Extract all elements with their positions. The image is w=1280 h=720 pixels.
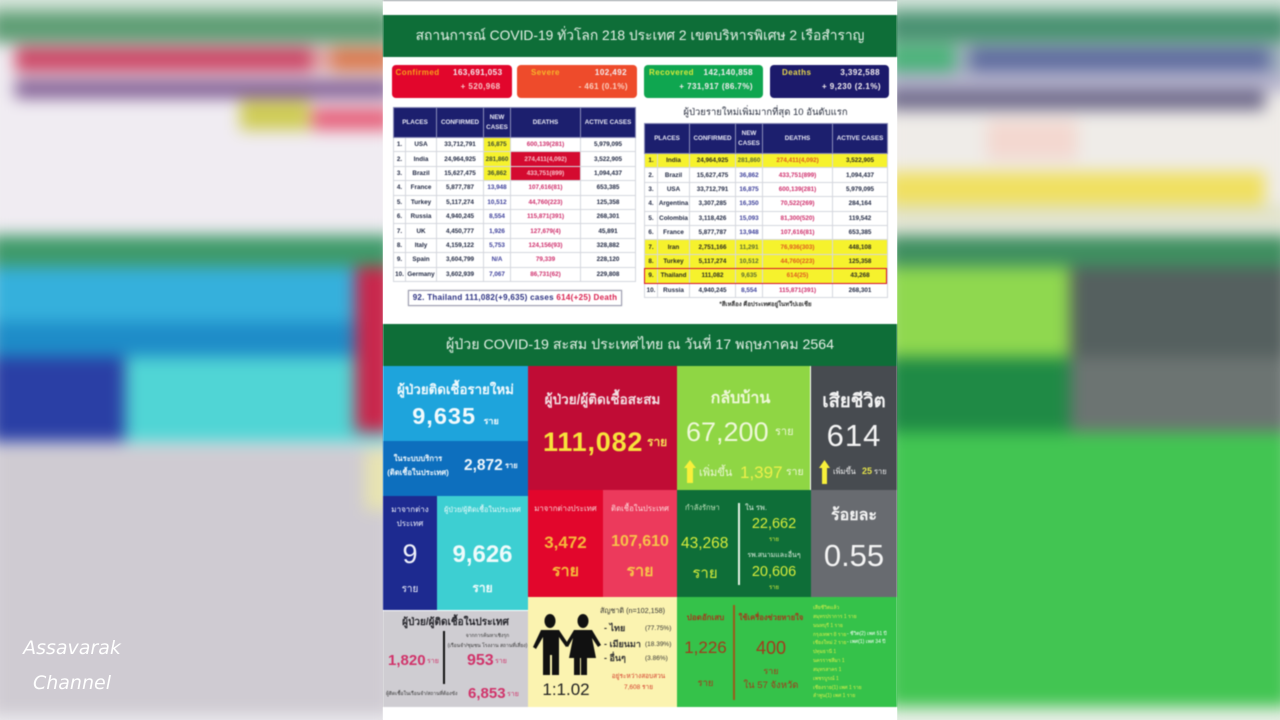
table: top 10 by total: 13,948 bbox=[487, 184, 507, 191]
text block: death details: กรุงเทพฯ 8 ราย bbox=[813, 632, 846, 638]
panel: in service system: (ติดเชื้อในประเทศ) bbox=[387, 468, 449, 477]
table: top 10 by new cases: 125,358 bbox=[849, 258, 871, 265]
table: top 10 by new cases: 3. bbox=[648, 186, 654, 193]
panel: domestic cumulative: ราย bbox=[627, 563, 653, 580]
table: top 10 by total: 16,875 bbox=[487, 141, 507, 148]
table: top 10 by total: 125,358 bbox=[597, 199, 619, 206]
table: top 10 by new cases: 70,522(269) bbox=[781, 200, 814, 207]
panel: in treatment: 20,606 bbox=[752, 564, 796, 580]
panel: percent fatality: ร้อยละ bbox=[831, 507, 877, 524]
panel: domestic breakdown: ราย bbox=[507, 691, 519, 698]
icon: up arrow bbox=[684, 460, 696, 484]
table: top 10 by total: 44,760(223) bbox=[529, 199, 562, 206]
table: top 10 by total: 1. bbox=[397, 141, 402, 148]
table: top 10 by new cases: 4. bbox=[648, 200, 654, 207]
panel: imported: ประเทศ bbox=[397, 519, 423, 528]
panel: deaths: 25 bbox=[862, 466, 872, 476]
panel: deaths bbox=[811, 366, 897, 490]
panel: nationality and gender ratio: (3.86%) bbox=[645, 655, 668, 662]
table: top 10 by total: 9. bbox=[397, 256, 402, 263]
highlight frame: Thailand row bbox=[644, 268, 887, 284]
text block: death details: เสียชีวิตแล้ว bbox=[813, 605, 839, 611]
table: top 10 by new cases: 33,712,791 bbox=[697, 186, 728, 193]
table: top 10 by new cases: 11,291 bbox=[740, 244, 758, 251]
blurred background: right bbox=[897, 0, 1280, 720]
table: top 10 by total: Turkey bbox=[411, 199, 431, 206]
table: top 10 by new cases: 5,979,095 bbox=[846, 186, 874, 193]
table: top 10 by new cases: 111,082 bbox=[701, 272, 724, 279]
table: top 10 by total: 115,871(391) bbox=[527, 213, 564, 220]
table: top 10 by new cases: 76,936(303) bbox=[781, 244, 814, 251]
table: top 10 by new cases: CASES bbox=[738, 140, 760, 146]
card: deaths: + 9,230 (2.1%) bbox=[822, 82, 881, 91]
panel: deaths: เพิ่มขึ้น bbox=[833, 467, 856, 476]
panel: deaths: เสียชีวิต bbox=[822, 390, 886, 411]
table: top 10 by new cases: 614(25) bbox=[787, 272, 808, 279]
table: top 10 by total: 86,731(62) bbox=[530, 271, 561, 278]
panel: nationality and gender ratio: - เมียนมา bbox=[604, 639, 641, 649]
table: top 10 by total: 127,679(4) bbox=[530, 228, 561, 235]
panel: nationality and gender ratio: 7,608 ราย bbox=[624, 684, 653, 691]
panel: domestic cumulative: 107,610 bbox=[611, 533, 669, 550]
card: severe bbox=[517, 65, 637, 98]
table: top 10 by total: CASES bbox=[486, 124, 508, 130]
table: top 10 by new cases: 8. bbox=[648, 258, 654, 265]
panel: imported cumulative: 3,472 bbox=[544, 533, 587, 552]
card: confirmed: Confirmed bbox=[396, 68, 440, 77]
table: top 10 by total: 1,926 bbox=[489, 228, 505, 235]
table: top 10 by new cases: 268,301 bbox=[849, 287, 871, 294]
table: top 10 by new cases: Russia bbox=[663, 287, 684, 294]
card: deaths bbox=[770, 65, 889, 98]
text block: death details: เชียงราย(1) เพศ 1 ราย bbox=[813, 685, 862, 691]
table: top 10 by new cases: 281,860 bbox=[738, 157, 760, 164]
table: top 10 by new cases: PLACES bbox=[654, 135, 680, 142]
table: top 10 by total: 1,094,437 bbox=[594, 170, 622, 177]
heading: Thailand cumulative bbox=[383, 324, 897, 366]
table: top 10 by new cases: Brazil bbox=[665, 172, 682, 179]
panel: recovered: เพิ่มขึ้น bbox=[699, 467, 732, 479]
table: top 10 by total: 268,301 bbox=[597, 213, 619, 220]
panel: deaths: ราย bbox=[874, 467, 887, 476]
table: top 10 by new cases: DEATHS bbox=[785, 135, 810, 142]
table: top 10 by new cases: Colombia bbox=[659, 215, 688, 222]
panel: imported bbox=[383, 496, 437, 610]
table: top 10 by total: 10,512 bbox=[487, 199, 507, 206]
card: severe: 102,492 bbox=[595, 68, 627, 77]
table: top 10 by total: 229,808 bbox=[597, 271, 619, 278]
panel: imported: 9 bbox=[402, 539, 418, 569]
table: top 10 by total: 5,117,274 bbox=[446, 199, 474, 206]
panel: cumulative cases: ผู้ป่วย/ผู้ติดเชื้อสะสม bbox=[545, 392, 660, 407]
panel: domestic cumulative bbox=[603, 490, 677, 597]
panel: severe patients: 400 bbox=[756, 638, 786, 658]
table: top 10 by new cases: 433,751(899) bbox=[779, 172, 816, 179]
panel: domestic breakdown: 1,820 bbox=[388, 652, 426, 669]
table: top 10 by total: 5,753 bbox=[489, 242, 505, 249]
panel: nationality and gender ratio: อยู่ระหว่างสอบสวน bbox=[612, 673, 665, 680]
table: top 10 by total: CONFIRMED bbox=[441, 119, 479, 126]
table: top 10 by total: 7. bbox=[397, 228, 402, 235]
panel: new cases bbox=[383, 366, 528, 441]
table: top 10 by new cases: Turkey bbox=[663, 258, 684, 265]
table: top 10 by new cases: 9. bbox=[648, 272, 654, 279]
table: top 10 by total: 8. bbox=[397, 242, 402, 249]
panel: in treatment: ราย bbox=[769, 585, 779, 591]
table: top 10 by new cases: 15,627,475 bbox=[697, 172, 728, 179]
table: top 10 by new cases: 8,554 bbox=[741, 287, 757, 294]
table: top 10 by new cases: 119,542 bbox=[849, 215, 871, 222]
table: top 10 by total: 3. bbox=[397, 170, 402, 177]
blurred background: left bbox=[0, 0, 383, 720]
infographic sheet bbox=[383, 0, 897, 720]
table: top 10 by total: NEW bbox=[490, 114, 504, 121]
card: confirmed: 163,691,053 bbox=[453, 68, 502, 77]
panel: imported cumulative bbox=[528, 490, 603, 597]
panel: percent fatality: 0.55 bbox=[824, 538, 884, 573]
table: top 10 by new cases: 7. bbox=[648, 244, 654, 251]
text block: death details: - เพศ(1) เพศ 34 ปี bbox=[847, 639, 885, 645]
card: recovered: 142,140,858 bbox=[704, 68, 753, 77]
panel: recovered: 67,200 bbox=[686, 417, 769, 447]
table: top 10 by total: Germany bbox=[407, 271, 435, 278]
table: top 10 by new cases bbox=[644, 123, 888, 298]
table: top 10 by total: 79,339 bbox=[536, 256, 555, 263]
table: top 10 by total: N/A bbox=[492, 256, 502, 263]
panel: nationality and gender ratio: 1:1.02 bbox=[542, 680, 590, 699]
text block: death details bbox=[812, 604, 888, 699]
icon: man and woman bbox=[532, 613, 602, 676]
panel: severe patients bbox=[677, 597, 897, 707]
panel: domestic: ผู้ป่วย/ผู้ติดเชื้อในประเทศ bbox=[444, 505, 521, 514]
table: top 10 by total: 5. bbox=[397, 199, 402, 206]
panel: imported cumulative: ราย bbox=[552, 563, 579, 580]
table: top 10 by new cases: 24,964,925 bbox=[697, 157, 728, 164]
panel: domestic breakdown: ผู้ติดเชื้อในเรือนจำ/สถานที่ต้องขัง bbox=[386, 691, 457, 697]
table: top 10 by total: 36,862 bbox=[487, 170, 507, 177]
table: top 10 by new cases: 1,094,437 bbox=[846, 172, 874, 179]
table: top 10 by total: Italy bbox=[415, 242, 427, 249]
panel: domestic: 9,626 bbox=[452, 541, 513, 568]
panel: recovered: ราย bbox=[775, 426, 794, 438]
table: top 10 by new cases: Iran bbox=[668, 244, 679, 251]
table: top 10 by new cases: 1. bbox=[648, 157, 654, 164]
panel: recovered: 1,397 bbox=[740, 463, 783, 482]
callout: Thailand rank: 92. Thailand 111,082(+9,635) cases 614(+25) Death bbox=[413, 293, 617, 302]
table: top 10 by total: ACTIVE CASES bbox=[585, 119, 631, 126]
panel: cumulative cases: ราย bbox=[647, 435, 667, 449]
table: top 10 by total: 10. bbox=[395, 271, 404, 278]
heading: world situation bbox=[383, 15, 897, 57]
panel: in treatment: ราย bbox=[692, 565, 718, 582]
table: top 10 by new cases: NEW bbox=[742, 130, 756, 137]
panel: domestic breakdown: ผู้ป่วย/ผู้ติดเชื้อในประเทศ bbox=[402, 617, 509, 628]
table: top 10 by total: 328,882 bbox=[597, 242, 619, 249]
panel: domestic breakdown: 953 bbox=[467, 652, 494, 669]
table: top 10 by total: 228,120 bbox=[597, 256, 619, 263]
table: top 10 by total bbox=[393, 107, 636, 282]
table: top 10 by new cases: 16,350 bbox=[739, 200, 759, 207]
panel: in treatment: ราย bbox=[769, 537, 779, 543]
table: top 10 by new cases: 10. bbox=[647, 287, 655, 294]
panel: in service system: ราย bbox=[505, 461, 518, 470]
table: top 10 by new cases: 4,940,245 bbox=[698, 287, 727, 294]
table: top 10 by new cases: 10,512 bbox=[739, 258, 759, 265]
table footnote: *สีเหลือง คือประเทศอยู่ในทวีปเอเชีย bbox=[719, 302, 812, 308]
text block: death details: นครราชสีมา 1 bbox=[813, 658, 845, 664]
panel: recovered bbox=[677, 366, 810, 490]
panel: nationality and gender ratio: - ไทย bbox=[604, 623, 625, 633]
panel: severe patients: ราย bbox=[697, 678, 714, 689]
panel: imported cumulative: มาจากต่างประเทศ bbox=[534, 504, 597, 513]
table: top 10 by total: 6. bbox=[397, 213, 402, 220]
icon: up arrow bbox=[818, 460, 830, 485]
table: top 10 by total: 3,604,799 bbox=[446, 256, 474, 263]
panel: domestic bbox=[437, 496, 528, 610]
table: top 10 by new cases: 2. bbox=[648, 172, 654, 179]
table: top 10 by total: 433,751(899) bbox=[527, 170, 564, 177]
panel: severe patients: ใช้เครื่องช่วยหายใจ bbox=[739, 613, 803, 622]
table: top 10 by total: PLACES bbox=[402, 119, 428, 126]
watermark: channel name bbox=[22, 637, 122, 694]
table: top 10 by new cases: India bbox=[666, 157, 681, 164]
table: top 10 by total: 653,385 bbox=[597, 184, 619, 191]
top edge strip bbox=[383, 0, 897, 1]
table: top 10 by new cases: 5,877,787 bbox=[698, 229, 727, 236]
watermark: channel name: Assavarak bbox=[23, 637, 121, 659]
table: top 10 by new cases: 3,118,426 bbox=[699, 215, 726, 222]
panel: domestic breakdown: (เรือนจำ/ชุมชน โรงงาน สถานที่เสี่ยง) bbox=[448, 643, 527, 649]
watermark: channel name: Channel bbox=[33, 672, 111, 694]
table: top 10 by total: 5,979,095 bbox=[594, 141, 622, 148]
panel: new cases: 9,635 ราย bbox=[412, 403, 499, 429]
panel: cumulative cases bbox=[528, 366, 677, 490]
text block: death details: ลำพูน(1) เพศ 1 ราย bbox=[813, 693, 855, 699]
table: top 10 by total: Russia bbox=[411, 213, 431, 220]
panel: in treatment: 43,268 bbox=[681, 535, 728, 552]
panel: imported: ราย bbox=[402, 584, 418, 595]
table: top 10 by new cases: 3,307,285 bbox=[698, 200, 727, 207]
panel: in treatment: 22,662 bbox=[752, 516, 796, 532]
table: top 10 by new cases: 274,411(4,092) bbox=[776, 157, 819, 164]
text block: death details: - ชีวิต(2) เพศ 51 ปี bbox=[847, 630, 887, 636]
table: top 10 by new cases: 653,385 bbox=[849, 229, 871, 236]
table: top 10 by new cases: 81,300(520) bbox=[781, 215, 814, 222]
panel: imported: มาจากต่าง bbox=[391, 505, 429, 514]
table: top 10 by total: France bbox=[411, 184, 431, 191]
table: top 10 by total: 4,940,245 bbox=[446, 213, 474, 220]
table: top 10 by new cases: 600,139(281) bbox=[779, 186, 816, 193]
table: top 10 by total: India bbox=[414, 156, 428, 163]
table: top 10 by new cases: France bbox=[663, 229, 684, 236]
table: top 10 by new cases: 43,268 bbox=[850, 272, 870, 279]
panel: domestic: ราย bbox=[472, 581, 493, 595]
table: top 10 by total: 4,450,777 bbox=[446, 228, 474, 235]
table: top 10 by total: USA bbox=[414, 141, 428, 148]
table: top 10 by new cases: 9,635 bbox=[741, 272, 757, 279]
table: top 10 by new cases: 36,862 bbox=[739, 172, 759, 179]
table: top 10 by new cases: CONFIRMED bbox=[693, 135, 732, 142]
panel: severe patients: ใน 57 จังหวัด bbox=[744, 680, 798, 691]
table: top 10 by total: DEATHS bbox=[533, 119, 558, 126]
text block: death details: เชียงใหม่ 2 ราย bbox=[813, 640, 846, 646]
panel: in service system bbox=[383, 441, 528, 496]
table title: top 10 new cases: ผู้ป่วยรายใหม่เพิ่มมากที่สุด 10 อันดับแรก bbox=[683, 107, 848, 118]
text block: death details: ปทุมธานี 1 bbox=[813, 649, 836, 655]
panel: severe patients: ราย bbox=[763, 666, 779, 676]
table: top 10 by new cases: 6. bbox=[648, 229, 654, 236]
card: recovered bbox=[644, 65, 763, 98]
heading: world situation: สถานการณ์ COVID-19 ทั่วโลก 218 ประเทศ 2 เขตบริหารพิเศษ 2 เรือสำราญ bbox=[416, 28, 864, 43]
table: top 10 by new cases: USA bbox=[667, 186, 680, 193]
text block: death details: สมุทรสาคร 1 bbox=[813, 667, 841, 673]
panel: in treatment: รพ.สนามและอื่นๆ bbox=[747, 552, 801, 559]
table: top 10 by new cases: 44,760(223) bbox=[781, 258, 814, 265]
panel: domestic breakdown: ราย bbox=[427, 658, 439, 665]
table: top 10 by new cases: ACTIVE CASES bbox=[837, 135, 883, 142]
panel: nationality and gender ratio: - อื่นๆ bbox=[604, 653, 626, 663]
panel: nationality and gender ratio: (18.39%) bbox=[645, 641, 671, 648]
table: top 10 by total: 45,891 bbox=[598, 228, 618, 235]
table: top 10 by total: 107,616(81) bbox=[529, 184, 562, 191]
panel: in treatment bbox=[677, 490, 811, 597]
table: top 10 by total: 2. bbox=[397, 156, 402, 163]
card: recovered: Recovered bbox=[649, 68, 694, 77]
table: top 10 by total: 274,411(4,092) bbox=[524, 156, 567, 163]
panel: in service system: ในระบบบริการ bbox=[394, 454, 442, 463]
table: top 10 by total: Brazil bbox=[412, 170, 430, 177]
table: top 10 by new cases: 5. bbox=[648, 215, 654, 222]
table: top 10 by total: 33,712,791 bbox=[444, 141, 476, 148]
panel: recovered: กลับบ้าน bbox=[711, 390, 770, 407]
table: top 10 by total: 15,627,475 bbox=[444, 170, 476, 177]
text block: death details: เพชรบูรณ์ 1 bbox=[813, 676, 839, 682]
panel: domestic breakdown: จากการค้นหาเชิงรุก bbox=[466, 633, 509, 639]
panel: nationality and gender ratio bbox=[528, 597, 677, 707]
table: top 10 by new cases: 3,522,905 bbox=[846, 157, 874, 164]
card: deaths: Deaths bbox=[782, 68, 811, 77]
panel: severe patients: ปอดอักเสบ bbox=[687, 613, 724, 622]
panel: in service system: 2,872 bbox=[464, 457, 503, 474]
panel: in treatment: ใน รพ. bbox=[745, 503, 767, 512]
table: top 10 by new cases: Thailand bbox=[661, 272, 686, 279]
panel: percent fatality bbox=[811, 490, 897, 597]
table: top 10 by total: 5,877,787 bbox=[446, 184, 474, 191]
card: confirmed: + 520,968 bbox=[461, 82, 500, 91]
table: top 10 by new cases: Argentina bbox=[659, 200, 688, 207]
table: top 10 by new cases: 13,948 bbox=[739, 229, 759, 236]
table: top 10 by total: 3,602,939 bbox=[446, 271, 474, 278]
panel: nationality and gender ratio: (77.75%) bbox=[645, 625, 671, 632]
card: deaths: 3,392,588 bbox=[840, 68, 880, 77]
table: top 10 by total: 124,156(93) bbox=[529, 242, 562, 249]
table: top 10 by new cases: 2,751,166 bbox=[698, 244, 727, 251]
text block: death details: สมุทรปราการ 1 ราย bbox=[813, 614, 856, 620]
panel: cumulative cases: 111,082 bbox=[543, 427, 643, 457]
panel: domestic breakdown: ราย bbox=[495, 658, 507, 665]
table: top 10 by total: 24,964,925 bbox=[444, 156, 476, 163]
card: recovered: + 731,917 (86.7%) bbox=[679, 82, 753, 91]
panel: domestic cumulative: ติดเชื้อในประเทศ bbox=[611, 504, 669, 513]
text block: death details: นนทบุรี 1 ราย bbox=[813, 623, 843, 629]
table: top 10 by new cases: 448,108 bbox=[849, 244, 871, 251]
table: top 10 by total: Spain bbox=[412, 256, 430, 263]
panel: new cases: ผู้ป่วยติดเชื้อรายใหม่ bbox=[397, 382, 514, 397]
table: top 10 by new cases: 5,117,274 bbox=[699, 258, 726, 265]
callout: Thailand rank bbox=[408, 290, 622, 306]
heading: Thailand cumulative: ผู้ป่วย COVID-19 สะสม ประเทศไทย ณ วันที่ 17 พฤษภาคม 2564 bbox=[446, 337, 834, 353]
table: top 10 by total: 8,554 bbox=[489, 213, 505, 220]
table: top 10 by new cases: 284,164 bbox=[849, 200, 871, 207]
table: top 10 by new cases: 107,616(81) bbox=[781, 229, 814, 236]
card: severe: Severe bbox=[531, 68, 560, 77]
table: top 10 by total: 4,159,122 bbox=[446, 242, 474, 249]
table: top 10 by total: 4. bbox=[397, 184, 402, 191]
panel: domestic breakdown bbox=[383, 611, 528, 707]
card: confirmed bbox=[392, 65, 512, 98]
table: top 10 by total: 7,067 bbox=[489, 271, 505, 278]
table: top 10 by total: 3,522,905 bbox=[594, 156, 622, 163]
card: severe: - 461 (0.1%) bbox=[579, 82, 628, 91]
table: top 10 by total: 281,860 bbox=[486, 156, 508, 163]
table: top 10 by new cases: 115,871(391) bbox=[779, 287, 816, 294]
table: top 10 by new cases: 16,875 bbox=[739, 186, 759, 193]
panel: domestic breakdown: 6,853 bbox=[468, 685, 506, 702]
table: top 10 by new cases: 15,093 bbox=[739, 215, 759, 222]
panel: recovered: ราย bbox=[786, 466, 804, 478]
table: top 10 by total: UK bbox=[416, 228, 426, 235]
table: top 10 by total: 600,139(281) bbox=[527, 141, 564, 148]
panel: in treatment: กำลังรักษา bbox=[685, 503, 720, 512]
panel: severe patients: 1,226 bbox=[684, 638, 727, 657]
panel: nationality and gender ratio: สัญชาติ (n=102,158) bbox=[600, 606, 665, 615]
panel: deaths: 614 bbox=[827, 418, 881, 453]
